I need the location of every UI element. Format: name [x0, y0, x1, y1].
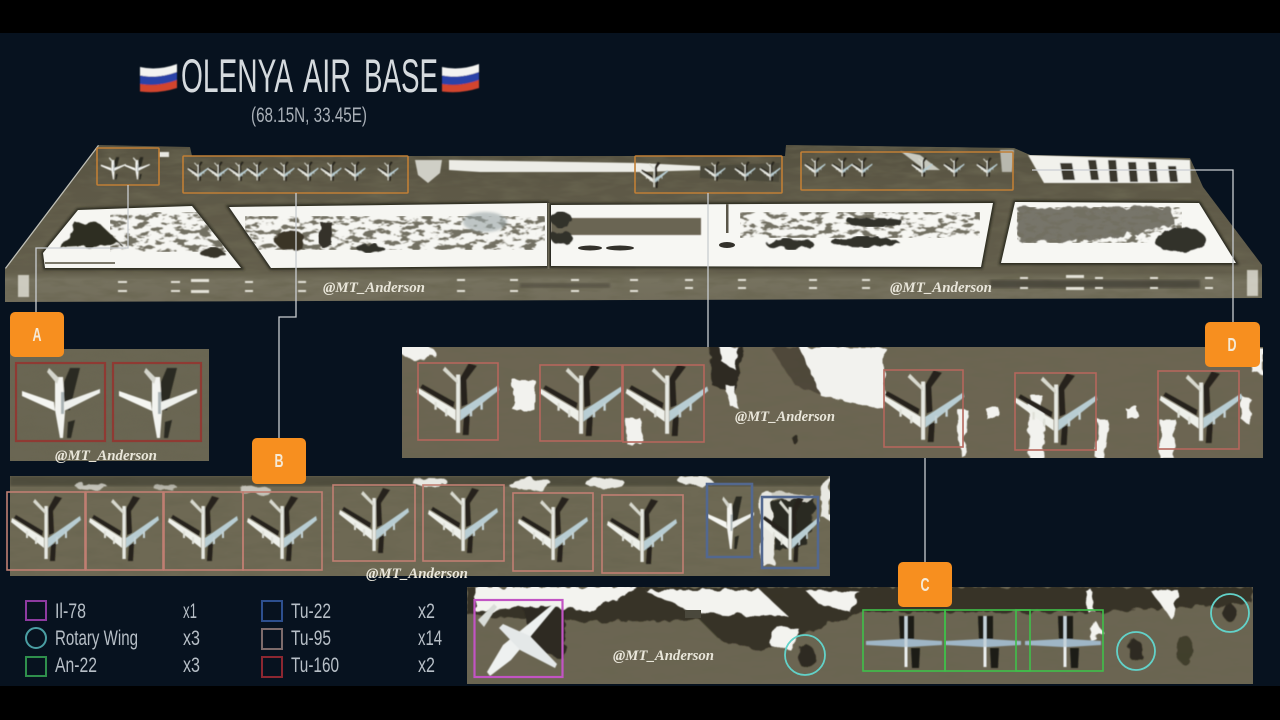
panel B: Tu-95 and Tu-22 close-up: @MT_Anderson	[366, 566, 468, 582]
parked aircraft on the apron	[101, 157, 998, 188]
legend: x2	[418, 654, 435, 677]
title: OLENYA	[181, 49, 293, 102]
watermark: @MT_Anderson	[890, 280, 992, 296]
leader lines from overview to panels	[36, 170, 1233, 564]
panel A: Tu-160 close-up: @MT_Anderson	[55, 448, 157, 464]
snow fields	[40, 200, 1238, 270]
legend	[26, 600, 442, 677]
satellite overview of the air base	[0, 140, 1280, 310]
badge C	[898, 562, 952, 607]
badge A: A	[32, 325, 42, 345]
legend: x14	[418, 627, 442, 650]
badge D	[1205, 322, 1260, 367]
icon: Il-78 aircraft	[478, 604, 557, 676]
icon: russian flag left	[140, 64, 177, 92]
icon: russian flag right	[442, 64, 479, 92]
legend: x1	[183, 600, 197, 623]
badge C: C	[920, 575, 930, 595]
legend: x3	[183, 654, 200, 677]
apron snow	[159, 150, 1191, 183]
badge D: D	[1228, 335, 1236, 355]
panel A: Tu-160 close-up	[10, 349, 209, 464]
legend: Rotary Wing	[55, 627, 138, 650]
legend: Tu-22	[291, 600, 331, 623]
legend: An-22	[55, 654, 97, 677]
badge B	[252, 438, 306, 484]
panel B: Tu-95 and Tu-22 close-up	[7, 476, 830, 582]
orange selection boxes	[97, 148, 1013, 193]
panel D: Tu-95 close-up	[401, 345, 1263, 458]
panel D: Tu-95 close-up: @MT_Anderson	[735, 409, 835, 425]
watermark: @MT_Anderson	[323, 280, 425, 296]
coordinates subtitle: (68.15N, 33.45E)	[251, 104, 367, 127]
badge B: B	[274, 451, 284, 471]
title: AIR	[303, 49, 351, 102]
legend: x2	[418, 600, 435, 623]
legend: Tu-160	[291, 654, 339, 677]
badge A	[10, 312, 64, 357]
legend: Il-78	[55, 600, 86, 623]
legend: x3	[183, 627, 200, 650]
title: BASE	[364, 49, 438, 102]
legend: Tu-95	[291, 627, 331, 650]
panel C: Il-78, An-22 and rotary wing close-up	[467, 587, 1253, 684]
title	[140, 49, 479, 102]
panel C: Il-78, An-22 and rotary wing close-up: @MT_Anderson	[613, 648, 714, 664]
runway markings	[18, 270, 1258, 297]
